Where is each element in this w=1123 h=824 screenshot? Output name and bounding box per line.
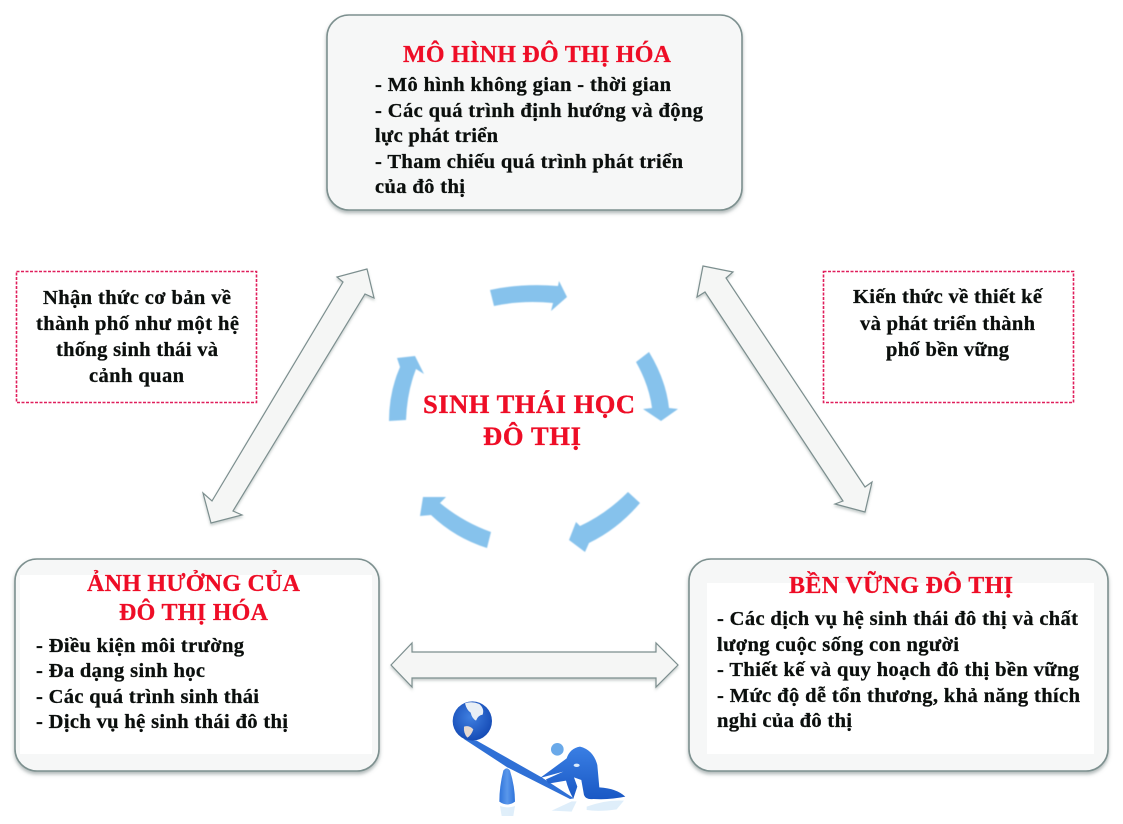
heading: ảnh hưởng của đô thị hóa [87,571,301,626]
icon: person head [551,743,564,756]
arrow: cycle top [490,281,567,311]
icon: seesaw beam [463,739,574,799]
heading: ảnh hưởng của đô thị hóa: ĐÔ THỊ HÓA [119,599,269,626]
callout: kiến thức về thiết kế: Kiến thức về thiết kế [853,286,1044,308]
heading: sinh thái học đô thị [423,389,635,451]
text block: bền vững list: - Mức độ dễ tổn thương, khả năng thích [717,685,1081,707]
icon: person body [540,747,625,799]
callout: kiến thức về thiết kế: phố bền vững [886,339,1010,361]
text block: bền vững list [717,608,1081,732]
text block: ảnh hưởng list: - Các quá trình sinh thái [36,686,259,708]
text block: mô hình đô thị hóa list [375,74,704,198]
icon: body highlight [574,764,580,767]
text block: mô hình đô thị hóa list: của đô thị [375,176,465,198]
text block: mô hình đô thị hóa list: lực phát triển [375,125,499,147]
callout: nhận thức cơ bản: thành phố như một hệ [36,313,239,335]
text block: bền vững list: - Thiết kế và quy hoạch đô thị bền vững [717,659,1080,681]
callout: nhận thức cơ bản: cảnh quan [89,365,185,387]
callout: nhận thức cơ bản: Nhận thức cơ bản về [43,287,231,309]
text block: mô hình đô thị hóa list: - Mô hình không gian - thời gian [375,74,672,96]
icon: globe [453,701,492,741]
heading: sinh thái học đô thị: ĐÔ THỊ [483,421,581,451]
arrow: cycle right [636,352,678,421]
panel: mô hình đô thị hóa [327,15,742,210]
heading: sinh thái học đô thị: SINH THÁI HỌC [423,389,635,419]
chart: circular cycle arrows [389,281,678,552]
text block: ảnh hưởng list [36,635,288,733]
heading: bền vững đô thị: BỀN VỮNG ĐÔ THỊ [789,572,1013,599]
heading: mô hình đô thị hóa: MÔ HÌNH ĐÔ THỊ HÓA [403,41,672,68]
heading: ảnh hưởng của đô thị hóa: ẢNH HƯỞNG CỦA [87,571,301,597]
text block: ảnh hưởng list: - Điều kiện môi trường [36,635,245,657]
arrow: cycle bottom left [420,497,491,548]
arrow: double arrow right diagonal [697,266,872,512]
text block: bền vững list: - Các dịch vụ hệ sinh thái đô thị và chất [717,608,1078,630]
callout: kiến thức về thiết kế: và phát triển thành [860,313,1036,335]
text block: mô hình đô thị hóa list: - Tham chiếu quá trình phát triển [375,151,684,173]
text block: ảnh hưởng list: - Đa dạng sinh học [36,660,205,682]
panel: ảnh hưởng của đô thị hóa [15,559,379,771]
icon: fulcrum [499,768,515,804]
panel: bền vững đô thị [689,559,1108,771]
callout: kiến thức về thiết kế [824,272,1074,402]
arrow: double arrow horizontal [391,643,678,687]
arrow: cycle bottom right [569,492,640,552]
text block: mô hình đô thị hóa list: - Các quá trình định hướng và động [375,100,704,122]
arrow: double arrow left diagonal [203,269,374,523]
text block: bền vững list: lượng cuộc sống con người [717,634,959,656]
icon: reflection [500,800,624,816]
text block: ảnh hưởng list: - Dịch vụ hệ sinh thái đô thị [36,711,288,733]
callout: nhận thức cơ bản [16,272,256,402]
text block: bền vững list: nghi của đô thị [717,710,852,732]
icon: person lifting globe on seesaw [453,701,625,816]
callout: nhận thức cơ bản: thống sinh thái và [56,339,218,361]
arrow: cycle left [389,356,424,421]
